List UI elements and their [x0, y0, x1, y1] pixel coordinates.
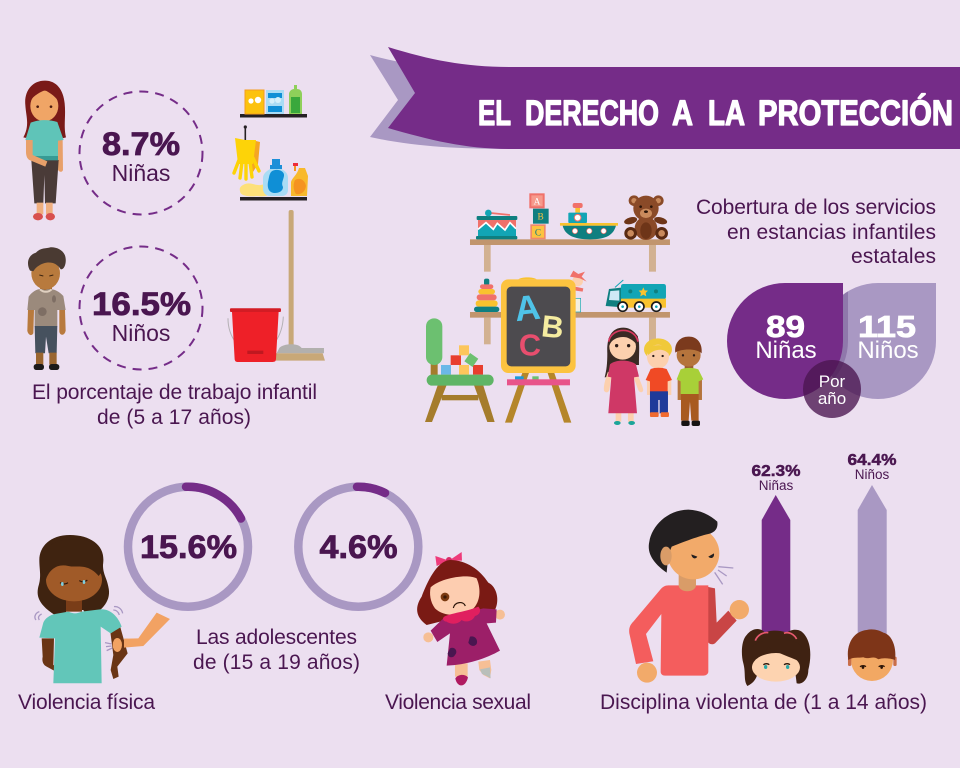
arrow: boys 64.4%: 64.4% — [848, 452, 896, 469]
icon: blackboard easel: A — [513, 288, 542, 329]
shelves — [470, 239, 670, 344]
dashed circle: girls labour: Niñas — [112, 160, 170, 186]
title ribbon: A — [672, 94, 693, 133]
icon: letter blocks: B — [538, 213, 544, 223]
icon: letter blocks — [529, 193, 549, 239]
dashed circle: girls labour: 8.7% — [102, 126, 180, 162]
text: adolescents: Las adolescentes — [196, 626, 357, 649]
drop chart: coverage: Niñas — [755, 337, 817, 364]
drop chart: coverage: año — [818, 389, 846, 408]
arrow: boys 64.4%: Niños — [855, 467, 890, 482]
icon: sad boy head — [848, 629, 897, 681]
title ribbon: EL — [478, 94, 511, 133]
text: coverage heading: en estancias infantiles — [727, 221, 936, 244]
label: sexual violence: Violencia sexual — [385, 691, 531, 714]
label: violent discipline: Disciplina violenta de (1 a 14 años) — [600, 691, 927, 714]
drop chart: coverage: Por — [819, 372, 846, 391]
icon: ragdoll — [417, 552, 505, 685]
title ribbon — [370, 47, 960, 149]
icon: blackboard easel — [501, 277, 576, 423]
dashed circle: boys labour — [80, 246, 202, 370]
text: coverage heading — [696, 196, 936, 268]
caption: child labour — [32, 381, 317, 429]
icon: shouting adult — [629, 510, 749, 683]
icon: letter blocks: C — [535, 228, 541, 238]
icon: toy boat — [560, 203, 618, 239]
ring chart: sexual violence 4.6% — [298, 487, 418, 607]
ring chart: physical violence 15.6%: 15.6% — [140, 529, 237, 565]
text: coverage heading: estatales — [851, 245, 936, 268]
icon: jester toy — [570, 271, 587, 312]
icon: mop and bucket — [228, 210, 325, 362]
icon: letter blocks: A — [534, 197, 541, 207]
arrow: boys 64.4% — [848, 452, 896, 635]
caption: child labour: El porcentaje de trabajo infantil — [32, 381, 317, 404]
drop chart: coverage: 89 — [766, 309, 805, 344]
caption: child labour: de (5 a 17 años) — [97, 406, 251, 429]
text: adolescents: de (15 a 19 años) — [193, 651, 360, 674]
icon: working girl — [23, 81, 66, 220]
icon: children group — [604, 328, 703, 426]
icon: crying girl head — [742, 629, 810, 686]
icon: working boy — [27, 247, 66, 370]
arrow: girls 62.3%: Niñas — [759, 478, 794, 493]
dashed circle: boys labour: 16.5% — [92, 286, 191, 322]
title ribbon: LA — [708, 94, 745, 133]
arrow: girls 62.3%: 62.3% — [752, 463, 800, 480]
icon: blackboard easel: B — [540, 309, 565, 345]
text: adolescents — [193, 626, 360, 674]
text: coverage heading: Cobertura de los servicios — [696, 196, 936, 219]
dashed circle: girls labour — [80, 92, 202, 214]
icon: toy chair with blocks — [425, 318, 495, 422]
icon: stacking rings — [474, 279, 499, 312]
icon: physical violence girl — [35, 535, 170, 683]
title ribbon: DERECHO — [525, 94, 659, 133]
ring chart: sexual violence 4.6%: 4.6% — [320, 529, 398, 565]
drop chart: coverage: Niños — [857, 337, 919, 364]
dashed circle: boys labour: Niños — [112, 320, 170, 346]
illustration: toys and classroom — [425, 193, 703, 426]
icon: blackboard easel: C — [519, 328, 541, 362]
icon: teddy bear — [623, 195, 668, 240]
icon: toy truck — [606, 280, 666, 311]
icon: cleaning shelves — [234, 85, 308, 200]
arrow: girls 62.3% — [752, 463, 800, 640]
icon: drum — [476, 210, 517, 239]
label: physical violence: Violencia física — [18, 691, 155, 714]
ring chart: physical violence 15.6% — [128, 487, 248, 607]
drop chart: coverage — [727, 283, 936, 418]
drop chart: coverage: 115 — [858, 309, 916, 344]
